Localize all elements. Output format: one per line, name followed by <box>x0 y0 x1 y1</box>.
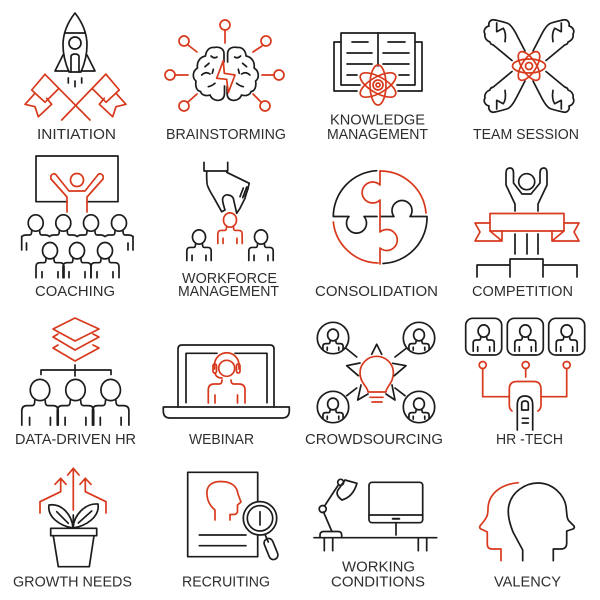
label: competition: COMPETITION <box>472 284 573 300</box>
label: brainstorming: BRAINSTORMING <box>166 127 286 143</box>
label: workforce management: WORKFORCE <box>182 271 277 287</box>
icon: fingerprint finger <box>517 396 533 430</box>
icon: resume <box>188 472 258 557</box>
label: initiation: INITIATION <box>37 127 116 143</box>
panel: team session <box>473 20 579 143</box>
label: crowdsourcing: CROWDSOURCING <box>305 432 443 448</box>
icon: plant pot <box>49 504 98 567</box>
label: recruiting: RECRUITING <box>182 575 270 591</box>
icon: board <box>36 156 118 202</box>
icon: magnifier <box>243 502 279 561</box>
icon: atom <box>357 65 399 105</box>
panel: working conditions <box>314 479 437 591</box>
label: knowledge management <box>327 112 428 143</box>
icon: red puzzle pieces <box>333 171 426 264</box>
label: consolidation: CONSOLIDATION <box>315 284 438 300</box>
panel: brainstorming <box>165 20 286 143</box>
icon: crowd members <box>317 322 435 423</box>
icon: org tree <box>41 365 111 376</box>
icon: lightning <box>217 61 235 93</box>
icon: growth arrows <box>40 468 106 513</box>
label: workforce management <box>178 271 279 300</box>
label: workforce management: MANAGEMENT <box>178 284 279 300</box>
icon: book <box>334 33 422 91</box>
panel: hr-tech <box>466 318 585 448</box>
panel: consolidation <box>315 171 438 300</box>
icon: laptop <box>163 345 289 418</box>
icon: brain <box>193 47 258 100</box>
label: coaching: COACHING <box>35 284 115 300</box>
panel: crowdsourcing <box>305 322 443 448</box>
label: working conditions: CONDITIONS <box>331 575 425 591</box>
panel: initiation <box>25 13 126 143</box>
icon: four fists <box>484 20 574 112</box>
label: valency: VALENCY <box>494 575 561 591</box>
panel: growth needs <box>13 468 132 591</box>
label: knowledge management: MANAGEMENT <box>327 127 428 143</box>
icon: ribbon <box>475 214 579 241</box>
label: knowledge management: KNOWLEDGE <box>330 112 425 128</box>
icon: hand <box>204 162 249 213</box>
icon: desk <box>314 538 437 551</box>
icon: candidate cards <box>466 318 585 355</box>
icon: red head <box>480 483 518 561</box>
label: hr-tech: HR -TECH <box>496 432 563 448</box>
panel: workforce management <box>178 162 279 300</box>
panel: competition <box>472 168 579 300</box>
panel: valency <box>480 483 574 591</box>
icon: presenter with headset <box>208 353 245 403</box>
panel: webinar <box>163 345 289 448</box>
panel: coaching <box>22 156 133 300</box>
icon: crossed flags <box>25 74 126 120</box>
icon: atom <box>512 48 546 84</box>
icon: selected person <box>218 213 242 243</box>
label: growth needs: GROWTH NEEDS <box>13 575 132 591</box>
icon: data layers <box>53 318 99 361</box>
icon: light bulb <box>360 356 393 402</box>
icon: people <box>22 379 129 425</box>
icon: team members <box>187 230 273 260</box>
label: data-driven hr: DATA-DRIVEN HR <box>15 432 136 448</box>
icon: rocket <box>55 13 95 87</box>
icon: podium <box>477 234 577 277</box>
label: team session: TEAM SESSION <box>473 127 579 143</box>
icon: connection lines <box>479 362 570 411</box>
label: webinar: WEBINAR <box>189 432 254 448</box>
icon: desk lamp <box>319 479 357 538</box>
panel: data-driven hr <box>15 318 136 448</box>
panel: recruiting <box>182 472 279 591</box>
icon: star rays <box>347 344 406 400</box>
icon: idea nodes <box>165 20 284 111</box>
icon: monitor <box>369 482 423 535</box>
icon: coach <box>51 174 103 212</box>
label: working conditions <box>331 560 425 591</box>
icon: head profile <box>207 482 241 520</box>
icon: black head <box>508 483 574 561</box>
icon: audience <box>22 215 133 278</box>
icon: black puzzle pieces <box>333 171 427 264</box>
icon: winner <box>506 168 547 211</box>
label: working conditions: WORKING <box>342 560 415 576</box>
panel: knowledge management <box>327 33 428 143</box>
